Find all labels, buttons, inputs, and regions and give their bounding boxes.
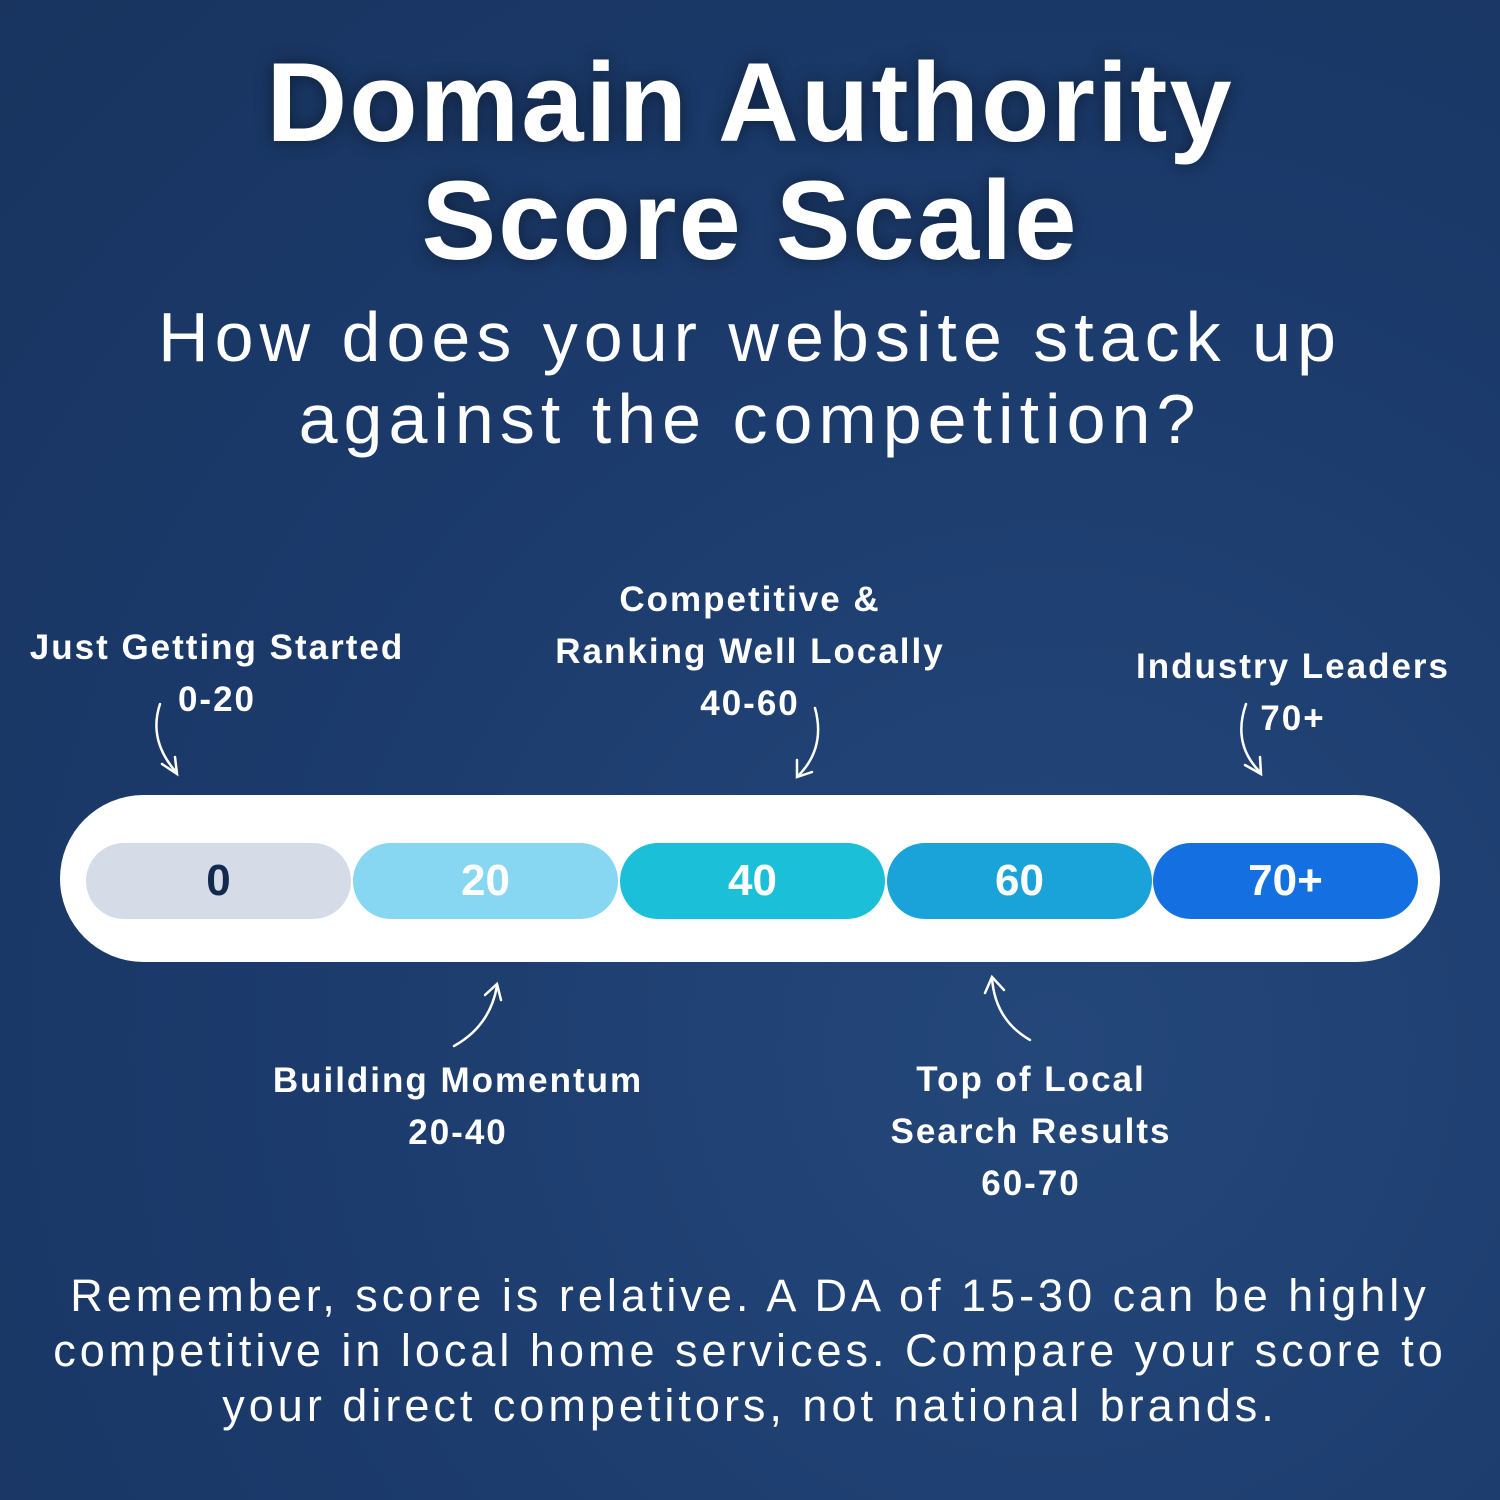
pill 20: 20 (461, 856, 510, 905)
label: top of local: 60-70 (981, 1164, 1081, 1203)
pill 40 (620, 843, 885, 919)
arrow: 60-70 (985, 977, 1030, 1040)
label: industry leaders: 70+ (1260, 699, 1326, 738)
label: just getting started: 0-20 (178, 680, 256, 719)
footer note (53, 1270, 1447, 1431)
label: competitive: Competitive & (619, 580, 881, 619)
label: just getting started: Just Getting Started (30, 628, 404, 667)
footer note: competitive in local home services. Compare your score to (53, 1325, 1447, 1376)
subtitle (158, 298, 1342, 458)
subtitle: against the competition? (299, 380, 1201, 458)
label: building momentum: 20-40 (408, 1113, 508, 1152)
title (266, 40, 1234, 283)
pill 70+: 70+ (1248, 856, 1323, 905)
scale bar (60, 795, 1440, 962)
label: top of local: Top of Local (916, 1060, 1146, 1099)
pill 0 (86, 843, 351, 919)
arrow: 20-40 (454, 984, 501, 1046)
pill 40: 40 (728, 856, 777, 905)
label: building momentum: Building Momentum (273, 1061, 643, 1100)
subtitle: How does your website stack up (158, 298, 1342, 376)
pill 60 (887, 843, 1152, 919)
label: industry leaders (1136, 647, 1450, 738)
label: competitive: Ranking Well Locally (555, 632, 945, 671)
title: Score Scale (421, 158, 1079, 283)
arrow: 40-60 (797, 708, 818, 777)
title: Domain Authority (266, 40, 1234, 165)
pill 0: 0 (206, 856, 231, 905)
label: building momentum (273, 1061, 643, 1152)
label: just getting started (30, 628, 404, 719)
label: top of local: Search Results (891, 1112, 1171, 1151)
arrow: 0-20 (156, 704, 177, 774)
label: industry leaders: Industry Leaders (1136, 647, 1450, 686)
arrow: 70+ (1241, 704, 1261, 774)
footer note: your direct competitors, not national brands. (222, 1380, 1278, 1431)
label: competitive (555, 580, 945, 723)
pill 70+ (1153, 843, 1418, 919)
footer note: Remember, score is relative. A DA of 15-30 can be highly (70, 1270, 1430, 1321)
label: top of local (891, 1060, 1171, 1203)
pill 20 (353, 843, 618, 919)
pill 60: 60 (995, 856, 1044, 905)
label: competitive: 40-60 (700, 684, 800, 723)
